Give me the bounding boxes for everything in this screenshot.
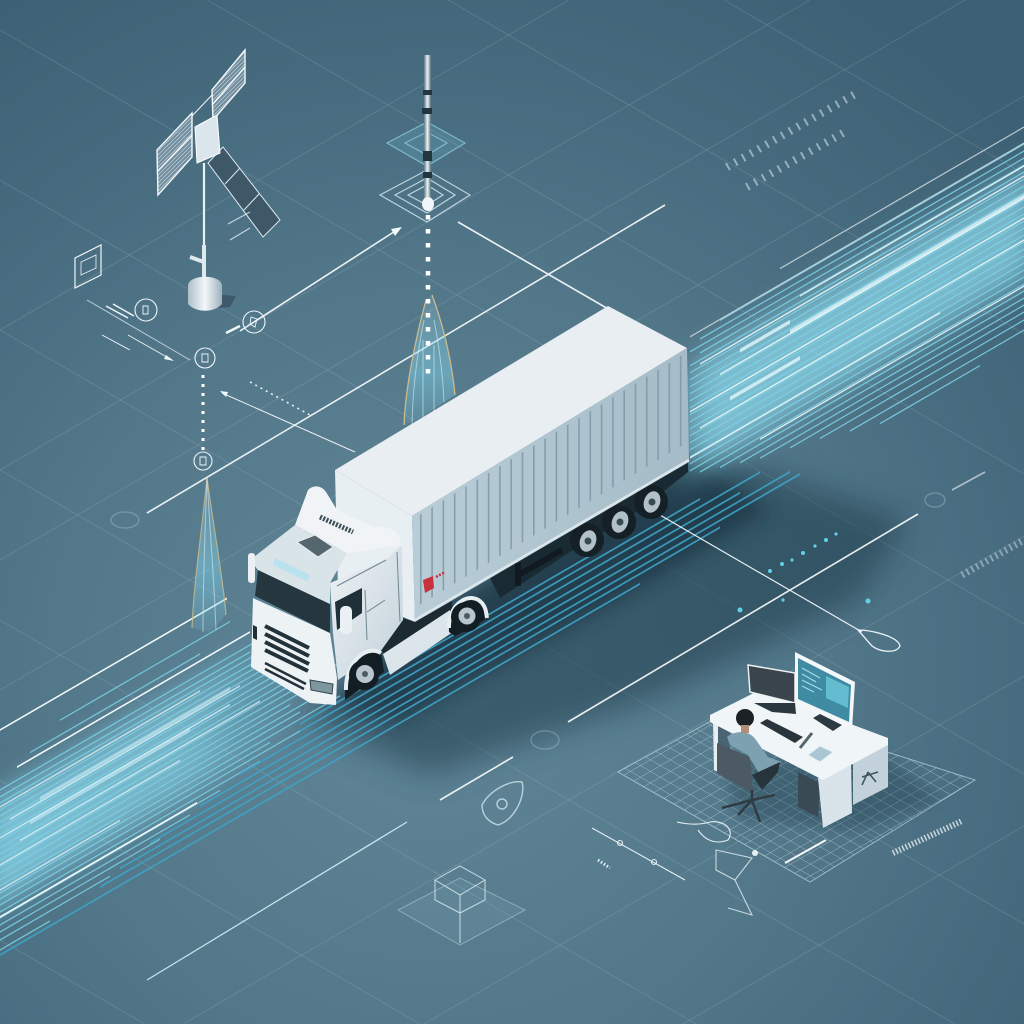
headlights	[253, 625, 333, 694]
cab front body	[251, 598, 337, 705]
trailer frame bar	[518, 550, 562, 586]
cab door seam	[337, 552, 400, 640]
container top	[335, 306, 687, 516]
dashed uplink from sensor	[202, 375, 204, 450]
data stream under truck	[0, 434, 800, 955]
desk back panel	[718, 725, 730, 770]
satellite	[157, 50, 280, 311]
garbled label right edge	[962, 540, 1024, 575]
connection lines	[87, 205, 985, 980]
desk cabinet	[853, 745, 888, 805]
workstation	[618, 652, 975, 882]
container ribs	[420, 397, 688, 560]
desk shadow	[720, 760, 940, 830]
cab front wheel	[345, 649, 384, 700]
desk left leg	[713, 720, 718, 772]
tower sensor heads	[422, 90, 432, 178]
faint ring marks	[111, 493, 945, 749]
signal beam near tower	[404, 295, 455, 425]
dashed uplink from tower	[426, 215, 430, 375]
icon: camera eye	[482, 782, 523, 825]
trailer underside	[490, 462, 688, 598]
mirrors	[248, 553, 352, 634]
container bottom rail	[415, 460, 689, 620]
desk front pillar	[818, 762, 852, 828]
tower	[380, 55, 470, 222]
operator	[717, 709, 782, 822]
icon: isometric cube base	[398, 866, 525, 945]
mouse and cable	[800, 733, 812, 748]
windshield	[255, 570, 330, 633]
tower foot	[422, 197, 434, 211]
roof hatch	[297, 535, 333, 557]
roof badge	[320, 517, 353, 532]
cab side skirt	[383, 610, 453, 675]
left monitor	[748, 665, 796, 714]
satellite mast	[203, 163, 205, 250]
circuit trace	[592, 822, 758, 915]
truck cast shadow	[300, 450, 910, 775]
arrow heads	[164, 227, 402, 397]
icon: sensor tags	[102, 299, 265, 470]
container side	[412, 348, 689, 622]
cab chassis gap	[380, 601, 452, 656]
chair base	[722, 790, 775, 822]
cab door	[330, 545, 403, 680]
operator head	[736, 709, 754, 727]
garbled label top right	[727, 93, 857, 187]
drawer unit	[798, 772, 820, 817]
operator legs	[752, 762, 780, 790]
small satellite antenna marks	[228, 212, 250, 240]
satellite body	[195, 115, 220, 163]
trailer wheels	[570, 485, 668, 557]
phone	[813, 714, 842, 731]
satellite mount	[190, 245, 204, 282]
container front face	[335, 470, 415, 622]
data stream upper right	[690, 118, 1024, 534]
cab side window	[335, 588, 362, 630]
data stream lower left	[0, 533, 340, 962]
desk top	[710, 690, 888, 780]
tablet	[808, 746, 833, 762]
cab rear wheel	[449, 597, 487, 636]
tower mast	[424, 55, 431, 203]
chair back	[717, 743, 753, 793]
roof deflector	[295, 486, 402, 553]
signal beam near sensor	[192, 478, 226, 632]
icon: device frame	[75, 245, 101, 288]
satellite solar panels	[157, 50, 245, 195]
stylus line near floor grid	[785, 840, 826, 863]
operator body	[727, 732, 782, 775]
keyboard	[760, 719, 803, 743]
right monitor	[795, 652, 855, 730]
logo on container	[423, 572, 445, 593]
cab roof	[250, 525, 347, 604]
satellite dark panel	[208, 147, 280, 237]
grille	[265, 626, 309, 689]
cab sign	[273, 558, 310, 582]
operator neck	[741, 725, 749, 733]
floor grid	[618, 705, 975, 882]
truck	[248, 306, 689, 705]
garbled label by desk	[893, 821, 962, 853]
icon: location pin right	[858, 630, 900, 651]
data nodes right	[738, 532, 870, 612]
tower ground rings	[380, 122, 470, 222]
satellite base	[188, 277, 236, 311]
